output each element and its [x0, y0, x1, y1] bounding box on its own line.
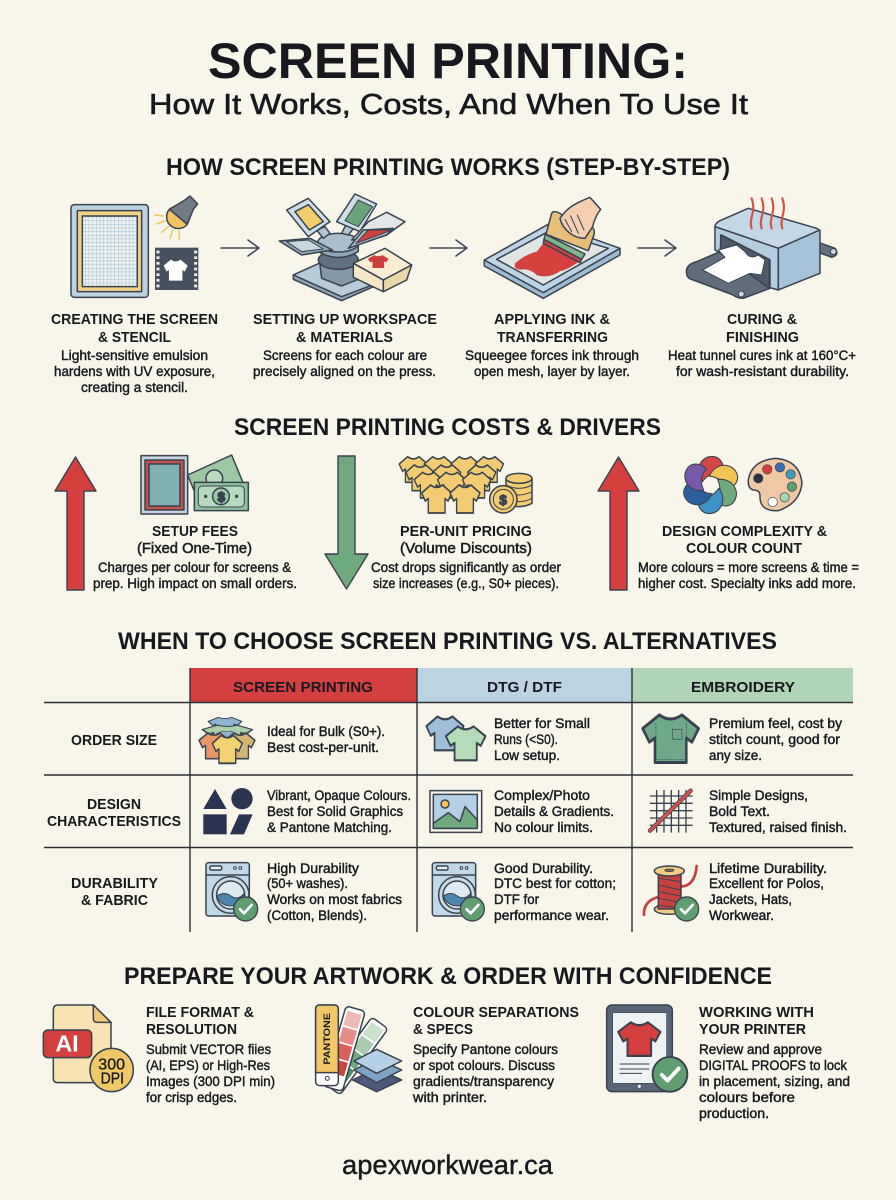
- text: lifetime durability: Excellent for Polos,: [709, 876, 824, 891]
- row label: design characteristics: CHARACTERISTICS: [47, 813, 181, 830]
- icon: AI file with 300 DPI badge: [43, 1005, 133, 1092]
- step text: applying ink: TRANSFERRING: [497, 329, 608, 346]
- panel: cost drivers: [55, 454, 859, 591]
- icon: screen and banknotes: [141, 455, 248, 514]
- text: colour separations and specs: with printer.: [412, 1090, 487, 1105]
- table header: dtg / dtf: [417, 668, 632, 702]
- text: design complexity: higher cost. Specialty inks add more.: [638, 576, 856, 591]
- step text: creating the screen: CREATING THE SCREEN: [51, 311, 218, 328]
- row label: design characteristics: DESIGN: [87, 796, 141, 813]
- title: [149, 33, 748, 121]
- text: file format and resolution: RESOLUTION: [146, 1021, 237, 1038]
- text: ideal for bulk: Best cost-per-unit.: [267, 740, 379, 755]
- step text: curing and finishing: for wash-resistant durability.: [676, 364, 849, 379]
- icon: AI file with 300 DPI badge: AI: [55, 1031, 79, 1057]
- step text: creating the screen: & STENCIL: [98, 329, 171, 346]
- text: lifetime durability: Workwear.: [709, 908, 774, 923]
- text: good durability: DTC best for cotton;: [494, 876, 616, 891]
- row label: order size: ORDER SIZE: [71, 732, 157, 749]
- heading: prepare your artwork: PREPARE YOUR ARTWORK & ORDER WITH CONFIDENCE: [124, 963, 772, 990]
- heading: how screen printing works: HOW SCREEN PRINTING WORKS (STEP-BY-STEP): [166, 154, 730, 181]
- text: colour separations and specs: COLOUR SEPARATIONS: [413, 1004, 579, 1021]
- text: working with your printer: [699, 1004, 850, 1121]
- table header: dtg / dtf: DTG / DTF: [487, 679, 562, 696]
- text: working with your printer: DIGITAL PROOFS to lock: [699, 1058, 847, 1073]
- icon: AI file with 300 DPI badge: 300: [98, 1056, 125, 1073]
- icon: tablet proof with check: [607, 1005, 687, 1092]
- text: file format and resolution: [146, 1004, 275, 1105]
- row label: durability and fabric: & FABRIC: [81, 892, 148, 909]
- step text: setting up workspace: [253, 311, 437, 379]
- text: high durability: (50+ washes).: [267, 876, 348, 891]
- text: colour separations and specs: [412, 1004, 579, 1105]
- arrow: volume lowers cost: [325, 456, 368, 589]
- row label: design characteristics: [47, 796, 181, 830]
- text: vibrant opaque colours: [267, 788, 411, 835]
- step text: applying ink: open mesh, layer by layer.: [474, 364, 630, 379]
- panel: process steps: [51, 194, 856, 395]
- text: per-unit pricing: [371, 523, 561, 591]
- table header: embroidery: [632, 668, 853, 702]
- text: simple designs: Bold Text.: [709, 804, 770, 819]
- row label: durability and fabric: DURABILITY: [71, 875, 158, 892]
- text: file format and resolution: Submit VECTOR fiies: [146, 1042, 271, 1057]
- icon: landscape photo: [430, 791, 482, 832]
- text: complex photo details: Details & Gradients.: [494, 804, 614, 819]
- text: design complexity: DESIGN COMPLEXITY &: [662, 523, 827, 540]
- text: colour separations and specs: & SPECS: [413, 1021, 473, 1038]
- text: good durability: Good Durability.: [494, 861, 593, 876]
- step text: creating the screen: [51, 311, 218, 395]
- step text: applying ink: APPLYING INK &: [494, 311, 610, 328]
- text: file format and resolution: Images (300 DPI min): [146, 1074, 275, 1089]
- text: colour separations and specs: or spot colours. Discuss: [413, 1058, 555, 1073]
- step text: setting up workspace: SETTING UP WORKSPACE: [253, 311, 437, 328]
- text: working with your printer: production.: [699, 1106, 769, 1121]
- text: high durability: High Durability: [267, 861, 359, 876]
- text: better for small runs: Better for Small: [494, 716, 590, 731]
- text: high durability: Works on most fabrics: [267, 892, 402, 907]
- text: per-unit pricing: size increases (e.g., S0+ pieces).: [373, 576, 559, 591]
- panel: artwork preparation: [43, 1004, 850, 1121]
- text: premium feel: [709, 716, 842, 763]
- step text: applying ink: Squeegee forces ink through: [465, 348, 639, 363]
- text: premium feel: stitch count, good for: [709, 732, 841, 747]
- arrow: step 2 to 3: [430, 240, 467, 256]
- text: good durability: [494, 861, 616, 923]
- text: working with your printer: in placement, sizing, and: [699, 1074, 850, 1089]
- text: high durability: (Cotton, Blends).: [267, 908, 367, 923]
- icon: t-shirts and coins: $: [499, 492, 507, 507]
- icon: t-shirts and coins: [399, 457, 532, 513]
- text: lifetime durability: Lifetime Durability.: [709, 861, 827, 876]
- comparison table: [44, 668, 853, 932]
- text: complex photo details: [494, 788, 614, 835]
- text: premium feel: Premium feel, cost by: [709, 716, 842, 731]
- icon: screen and banknotes: $: [218, 489, 226, 504]
- step text: applying ink: [465, 311, 639, 379]
- text: setup fees: prep. High impact on small orders.: [93, 576, 297, 591]
- arrow: step 3 to 4: [638, 240, 676, 256]
- step text: creating the screen: creating a stencil.: [81, 380, 188, 395]
- icon: stack of t-shirts: [199, 717, 255, 763]
- text: design complexity: More colours = more screens & time =: [638, 560, 859, 575]
- icon: screen, lamp and film: [71, 196, 198, 297]
- step text: curing and finishing: [668, 311, 856, 379]
- text: better for small runs: [494, 716, 590, 763]
- text: lifetime durability: Jackets, Hats,: [709, 892, 792, 907]
- icon: AI file with 300 DPI badge: DPI: [101, 1070, 124, 1087]
- text: simple designs: Simple Designs,: [709, 788, 808, 803]
- text: setup fees: Charges per colour for screens &: [98, 560, 291, 575]
- footer: website: apexworkwear.ca: [342, 1150, 554, 1180]
- text: good durability: DTF for: [494, 892, 539, 907]
- text: good durability: performance wear.: [494, 908, 609, 923]
- title: How It Works, Costs, And When To Use It: [149, 89, 748, 121]
- text: simple designs: Textured, raised finish.: [709, 820, 847, 835]
- icon: stitch grid: [650, 790, 693, 833]
- text: better for small runs: Runs (<S0).: [494, 732, 558, 747]
- icon: squeegee and ink: [484, 197, 620, 298]
- text: simple designs: [709, 788, 847, 835]
- text: complex photo details: No colour limits.: [494, 820, 593, 835]
- text: better for small runs: Low setup.: [494, 748, 560, 763]
- icon: curing tunnel: [686, 198, 837, 298]
- text: working with your printer: Review and approve: [699, 1042, 822, 1057]
- heading: when to choose: WHEN TO CHOOSE SCREEN PRINTING VS. ALTERNATIVES: [118, 628, 777, 655]
- icon: green t-shirt with pocket: [643, 715, 699, 763]
- title: SCREEN PRINTING:: [208, 33, 688, 89]
- text: file format and resolution: (AI, EPS) or High-Res: [146, 1058, 270, 1073]
- text: file format and resolution: FILE FORMAT &: [146, 1004, 254, 1021]
- text: working with your printer: WORKING WITH: [699, 1004, 814, 1021]
- text: per-unit pricing: (Volume Discounts): [400, 540, 532, 557]
- text: vibrant opaque colours: Vibrant, Opaque Colours.: [267, 788, 411, 803]
- arrow: setup fees increase cost: [55, 457, 96, 590]
- step text: creating the screen: hardens with UV exposure,: [54, 364, 215, 379]
- step text: setting up workspace: Screens for each colour are: [263, 348, 427, 363]
- table header: screen printing: [190, 668, 417, 702]
- text: design complexity: [638, 523, 859, 591]
- text: ideal for bulk: Ideal for Bulk (S0+).: [267, 724, 385, 739]
- icon: thread spool with check: [644, 866, 699, 921]
- icon: washing machine with check: [206, 863, 258, 921]
- icon: colour wheel and palette: [679, 454, 802, 516]
- text: per-unit pricing: PER-UNIT PRICING: [400, 523, 532, 540]
- text: per-unit pricing: Cost drops significantly as order: [371, 560, 561, 575]
- table header: screen printing: SCREEN PRINTING: [233, 679, 373, 696]
- icon: pantone swatches and layers: [316, 1005, 402, 1095]
- text: colour separations and specs: Specify Pantone colours: [413, 1042, 558, 1057]
- row label: durability and fabric: [71, 875, 158, 909]
- text: high durability: [267, 861, 402, 923]
- text: premium feel: any size.: [709, 748, 762, 763]
- icon: solid shapes: [203, 788, 253, 834]
- text: setup fees: SETUP FEES: [152, 523, 238, 540]
- text: complex photo details: Complex/Photo: [494, 788, 590, 803]
- arrow: complexity increases cost: [598, 457, 639, 590]
- step text: curing and finishing: CURING &: [727, 311, 797, 328]
- step text: curing and finishing: Heat tunnel cures ink at 160°C+: [668, 348, 856, 363]
- arrow: step 1 to 2: [221, 240, 259, 256]
- text: vibrant opaque colours: & Pantone Matching.: [267, 820, 392, 835]
- icon: two t-shirts: [426, 716, 485, 760]
- text: ideal for bulk: [267, 724, 385, 755]
- text: lifetime durability: [709, 861, 827, 923]
- text: working with your printer: colours before: [699, 1090, 795, 1105]
- step text: creating the screen: Light-sensitive emulsion: [61, 348, 208, 363]
- text: setup fees: [93, 523, 297, 591]
- text: colour separations and specs: gradients/transparency: [413, 1074, 554, 1089]
- text: vibrant opaque colours: Best for Solid Graphics: [267, 804, 403, 819]
- icon: rotary press: [279, 194, 412, 301]
- text: setup fees: (Fixed One-Time): [137, 540, 252, 557]
- step text: setting up workspace: & MATERIALS: [296, 329, 393, 346]
- table header: embroidery: EMBROIDERY: [691, 679, 795, 696]
- icon: pantone swatches and layers: PANTONE: [322, 1013, 332, 1065]
- icon: washing machine with check (dtg): [432, 863, 484, 921]
- text: working with your printer: YOUR PRINTER: [699, 1021, 806, 1038]
- step text: curing and finishing: FINISHING: [726, 329, 799, 346]
- text: design complexity: COLOUR COUNT: [686, 540, 802, 557]
- heading: costs and drivers: SCREEN PRINTING COSTS & DRIVERS: [234, 414, 661, 441]
- text: file format and resolution: for crisp edges.: [146, 1090, 237, 1105]
- step text: setting up workspace: precisely aligned on the press.: [253, 364, 436, 379]
